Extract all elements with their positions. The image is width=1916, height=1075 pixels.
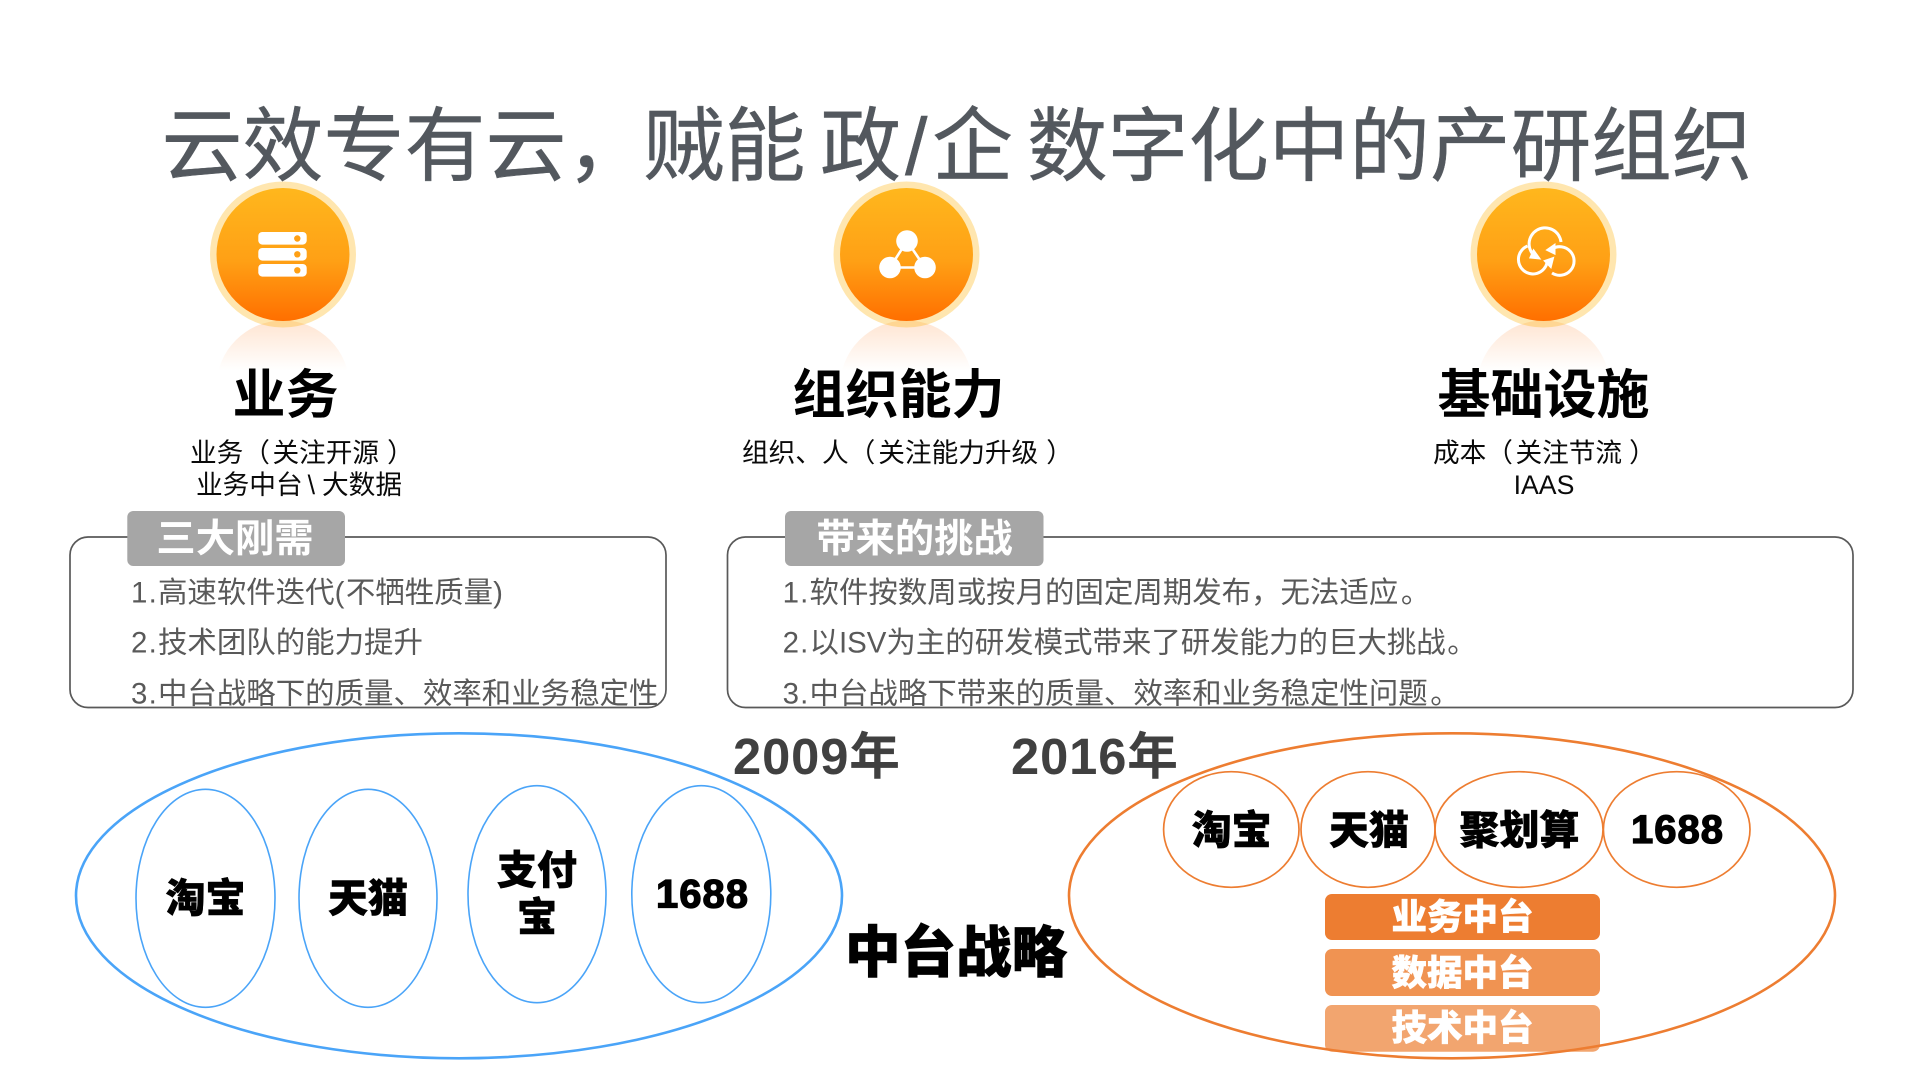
text: organisation focus: 组织、人（关注能力升级 ） <box>742 438 1073 468</box>
title: 云效专有云， <box>162 102 648 192</box>
bar: technology platform: 技术中台 <box>1391 1008 1534 1048</box>
title: 数字化中的产研组织 <box>1027 102 1752 192</box>
tag: challenges: 带来的挑战 <box>816 517 1013 561</box>
heading: organisation capability: 组织能力 <box>792 366 1004 425</box>
label: middle-platform strategy: 中台战略 <box>845 922 1067 984</box>
list: three core needs <box>131 576 658 710</box>
bubble: Juhuasuan: 聚划算 <box>1460 809 1580 853</box>
bar: business platform: 业务中台 <box>1391 897 1534 937</box>
title: 企 <box>932 102 1013 192</box>
text: business focus <box>190 438 414 500</box>
icon: server orb <box>210 182 356 454</box>
list: challenges: 2.以ISV为主的研发模式带来了研发能力的巨大挑战。 <box>783 626 1477 660</box>
bubble: Tmall: 天猫 <box>328 877 408 921</box>
bubble: Taobao: 淘宝 <box>166 877 246 921</box>
bubble: Alipay: 宝 <box>517 896 557 940</box>
tag: challenges <box>785 511 1044 566</box>
list: three core needs: 3.中台战略下的质量、效率和业务稳定性 <box>131 678 658 710</box>
text: infrastructure focus: IAAS <box>1514 470 1574 500</box>
title: / <box>905 102 928 192</box>
heading: business: 业务 <box>232 366 338 425</box>
bubble: 1688: 1688 <box>656 872 749 916</box>
bubble: 1688 <box>632 786 771 1003</box>
tag: three core needs <box>127 511 345 566</box>
heading: infrastructure: 基础设施 <box>1438 366 1650 425</box>
bar: business platform <box>1325 894 1600 940</box>
icon: network orb <box>834 182 980 454</box>
bubble: Tmall 2016 <box>1301 772 1435 887</box>
list: three core needs: 2.技术团队的能力提升 <box>131 626 423 660</box>
title: 政 <box>820 102 901 192</box>
bubble: Alipay: 支付 <box>497 849 577 893</box>
list: challenges: 3.中台战略下带来的质量、效率和业务稳定性问题。 <box>783 678 1460 710</box>
column: infrastructure <box>1433 182 1656 500</box>
bubble: Taobao <box>136 789 275 1007</box>
column: organisation capability <box>742 182 1073 468</box>
bubble: Tmall 2016: 天猫 <box>1329 809 1409 853</box>
bar: data platform: 数据中台 <box>1391 953 1534 993</box>
diagram: 2009 structure <box>76 733 842 1058</box>
list: challenges: 1.软件按数周或按月的固定周期发布，无法适应。 <box>783 576 1430 610</box>
bubble: 1688 2016: 1688 <box>1631 808 1724 852</box>
bubble: Taobao 2016: 淘宝 <box>1192 809 1272 853</box>
title: 贼能 <box>644 102 806 192</box>
text: infrastructure focus: 成本（关注节流 ） <box>1433 438 1656 468</box>
text: business focus: 业务（关注开源 ） <box>190 438 414 468</box>
label: 2016: 2016年 <box>1011 728 1178 785</box>
panel: three core needs <box>70 511 666 710</box>
icon: cloud cycle orb <box>1470 182 1616 454</box>
bubble: Tmall <box>299 789 437 1007</box>
column: business <box>190 182 414 500</box>
bubble: Juhuasuan <box>1435 772 1603 887</box>
text: business focus: 业务中台\ 大数据 <box>196 470 402 500</box>
list: challenges <box>783 576 1477 710</box>
bubble: Alipay <box>468 786 606 1003</box>
bar: technology platform <box>1325 1005 1600 1052</box>
tag: three core needs: 三大刚需 <box>156 517 314 561</box>
label: 2009: 2009年 <box>733 728 900 785</box>
panel: challenges <box>728 511 1853 710</box>
list: three core needs: 1.高速软件迭代(不牺牲质量) <box>131 576 503 610</box>
bar: data platform <box>1325 949 1600 996</box>
diagram: 2016 structure <box>1069 733 1835 1058</box>
text: infrastructure focus <box>1433 438 1656 500</box>
bubble: 1688 2016 <box>1603 772 1750 887</box>
bubble: Taobao 2016 <box>1164 772 1299 887</box>
